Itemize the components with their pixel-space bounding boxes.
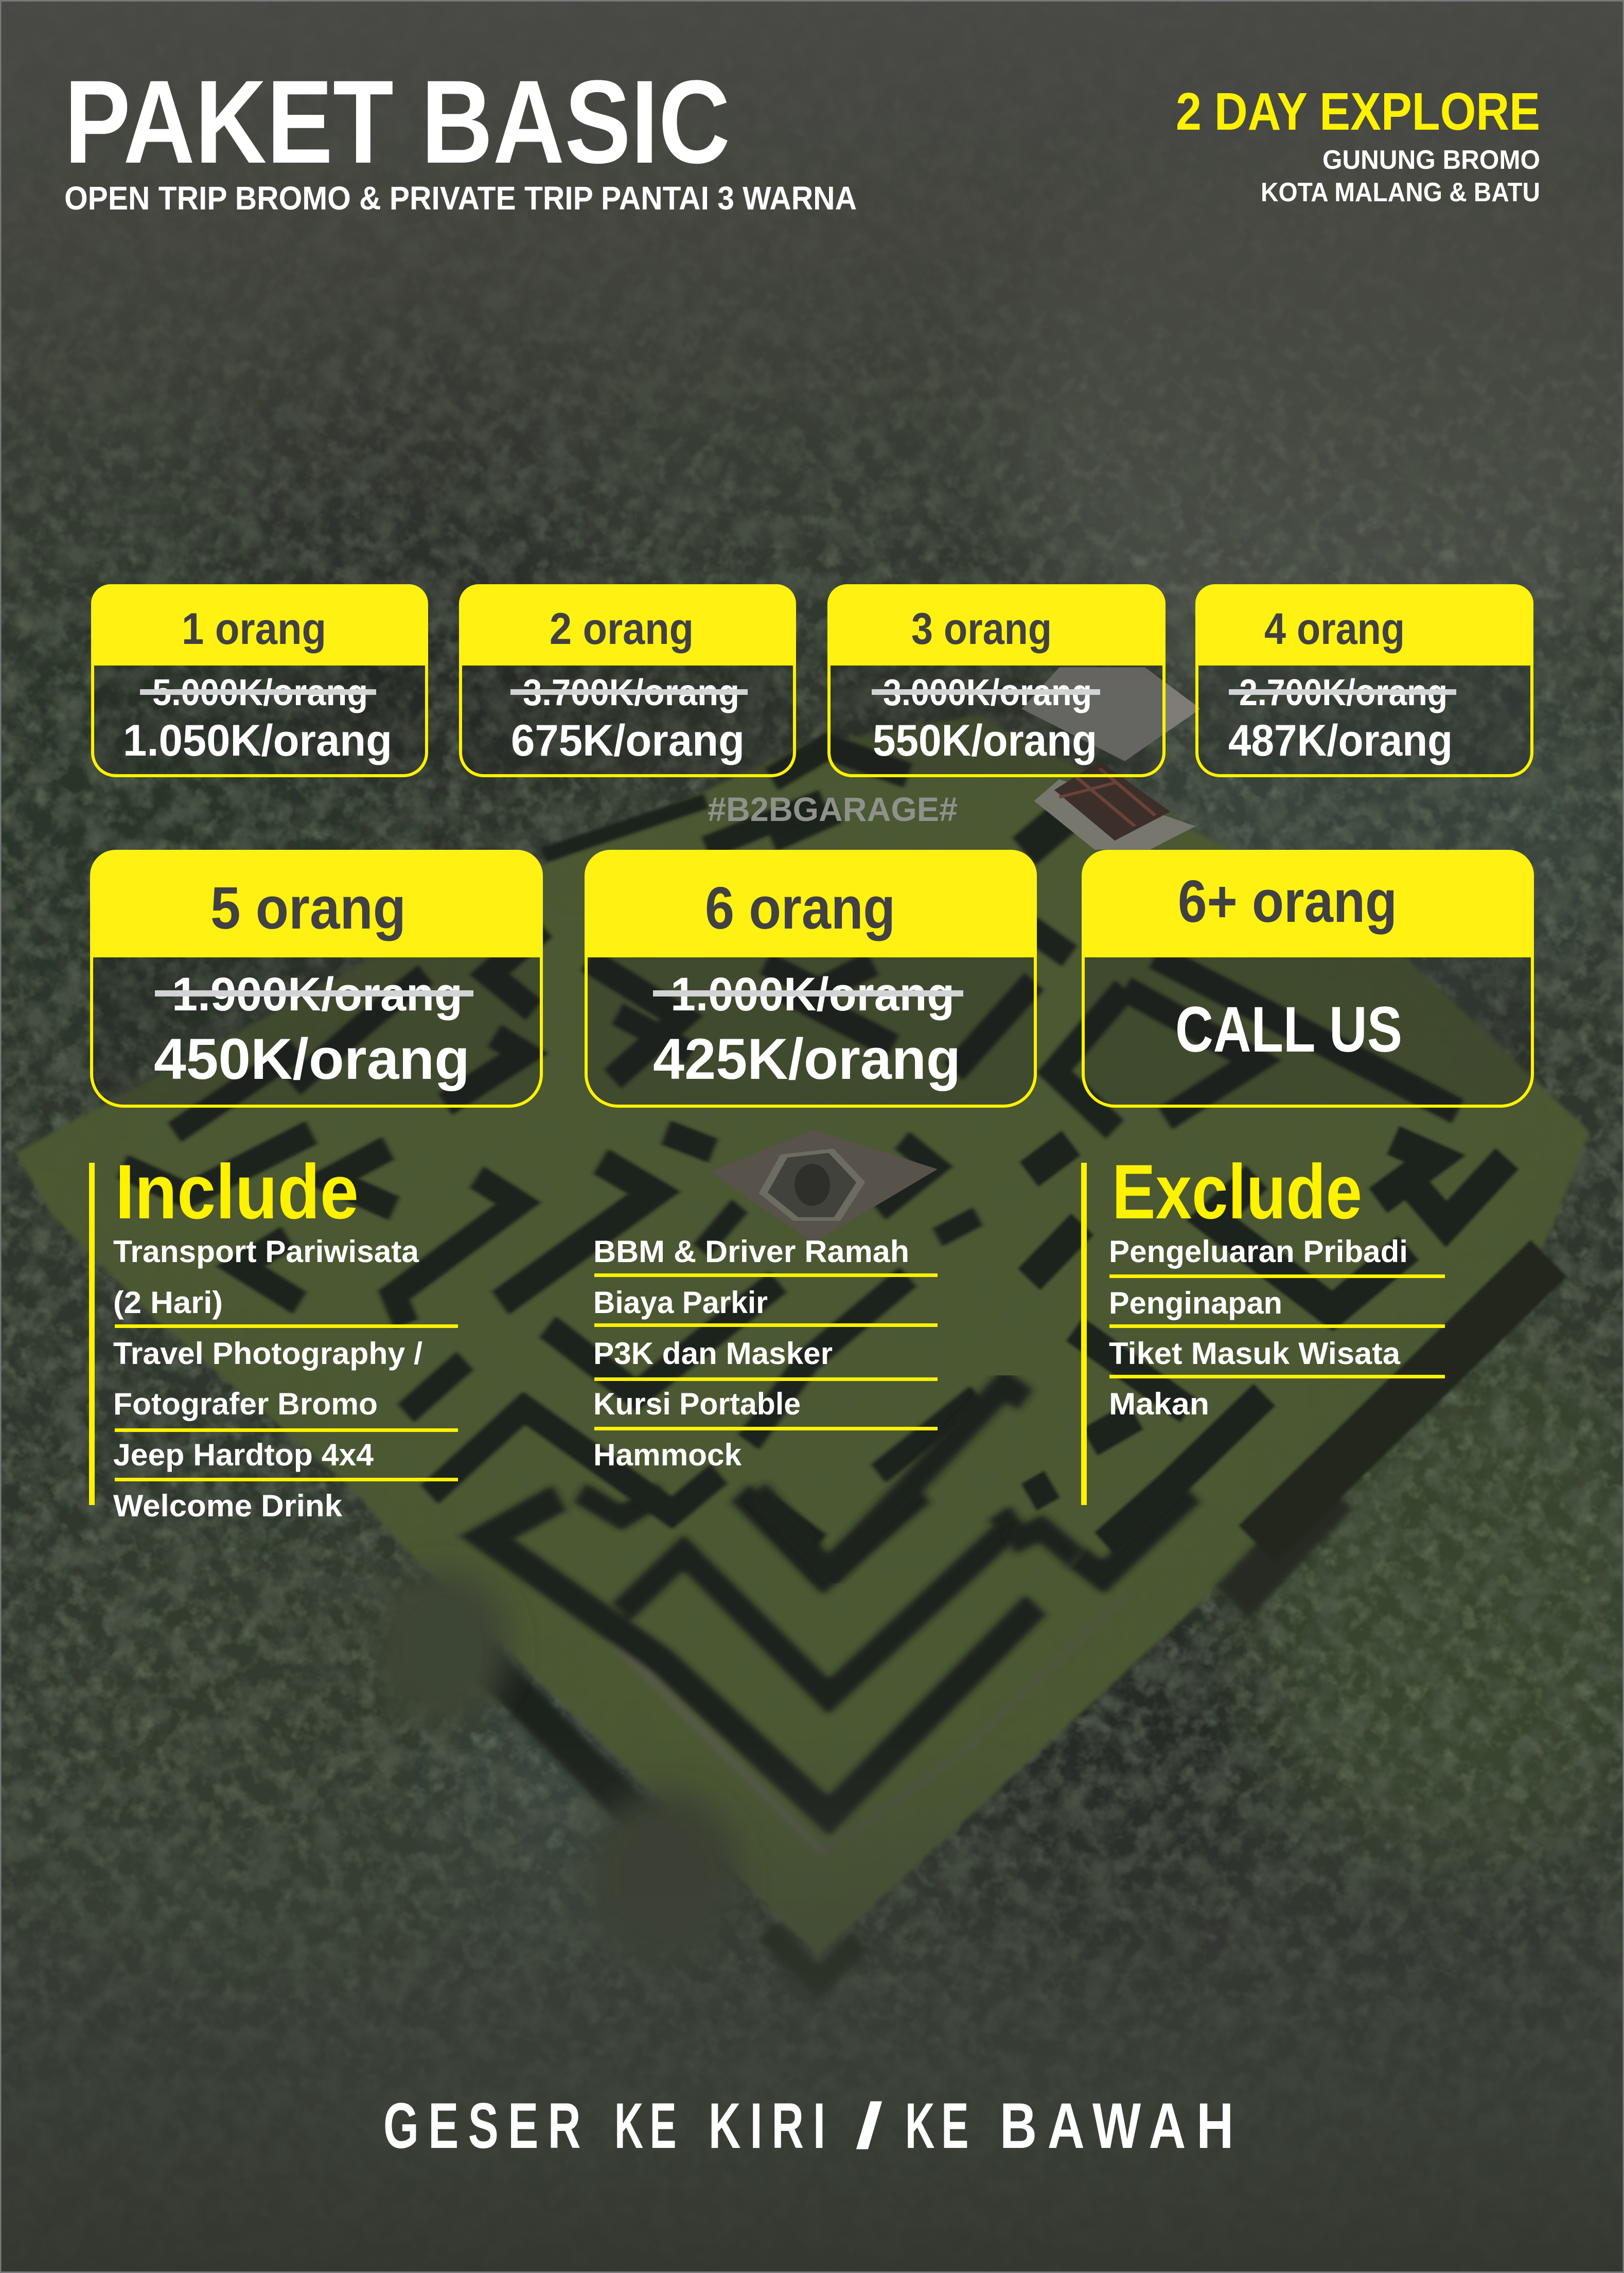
header label: 6 orang [705,875,895,941]
card body [829,664,1164,776]
include item: BBM & Driver Ramah [593,1234,909,1269]
card body [93,664,427,776]
accent bar [1081,1163,1087,1505]
card body [92,956,541,1106]
new price: 487K/orang [1228,716,1453,765]
new price: 1.050K/orang [123,716,392,765]
maze: left channels [122,1132,978,1544]
include item: Jeep Hardtop 4x4 [113,1438,374,1472]
include item: Hammock [593,1438,742,1472]
price card: 4 orang [1195,584,1533,776]
footer instruction: / [855,2090,883,2162]
card body [1197,664,1532,776]
header label: 5 orang [210,875,406,941]
card header [91,584,428,664]
strike line [872,689,1100,695]
card body [1083,956,1532,1106]
include item: Kursi Portable [593,1387,801,1421]
old price: 3.700K/orang [523,672,739,713]
header label: 4 orang [1264,604,1405,654]
exclude item: Pengeluaran Pribadi [1109,1234,1408,1269]
fountain plaza [710,1130,938,1243]
footer instruction: KE [614,2090,683,2162]
new price: 450K/orang [154,1027,470,1091]
header label: 1 orang [182,604,326,654]
old price: 5.000K/orang [152,672,368,713]
card header [1082,850,1534,956]
include item: Fotografer Bromo [113,1387,378,1421]
price card: 5 orang [90,850,543,1106]
strike line [140,689,376,695]
include item: Travel Photography / [113,1336,422,1371]
subtitle: OPEN TRIP BROMO & PRIVATE TRIP PANTAI 3 WARNA [64,180,857,217]
maze: centre channels [756,1385,1077,1573]
strike line [510,689,748,695]
card header [827,584,1166,664]
footer instruction: GESER [383,2090,590,2162]
footer instruction [383,2090,1244,2162]
maze: lower channels [446,1493,1336,1983]
card header [1195,584,1533,664]
strike line [1229,689,1456,695]
old price: 3.000K/orang [883,672,1092,713]
price card: 3 orang [827,584,1166,776]
footer instruction: KE [905,2090,975,2162]
exclude heading: Exclude [1112,1148,1362,1235]
pavilion building [1021,667,1201,850]
include item: Transport Pariwisata [113,1234,419,1269]
destination line 2: KOTA MALANG & BATU [1261,178,1540,207]
include item: Welcome Drink [113,1489,343,1523]
title: PAKET BASIC [64,56,730,188]
header label: 3 orang [911,604,1052,654]
bushes over maze tip [376,1570,741,1966]
accent bar [89,1163,95,1505]
maze: right channels [1029,1140,1549,1544]
price card: 6+ orang [1082,850,1534,1106]
duration heading: 2 DAY EXPLORE [1176,82,1540,141]
card body [586,956,1035,1106]
price card: 2 orang [459,584,796,776]
price card: 6 orang [585,850,1037,1106]
card header [459,584,796,664]
include item: P3K dan Masker [593,1336,833,1371]
new price: 550K/orang [873,716,1097,765]
include item: (2 Hari) [113,1285,223,1320]
include heading: Include [115,1148,359,1235]
new price: 425K/orang [653,1027,961,1091]
strike line [155,990,473,996]
price card: 1 orang [91,584,428,776]
exclude item: Tiket Masuk Wisata [1109,1336,1401,1371]
hedge maze base [0,710,1624,1961]
old price: 1.000K/orang [670,968,955,1021]
new price: 675K/orang [511,716,745,765]
exclude item: Penginapan [1109,1286,1282,1320]
header label: 6+ orang [1178,868,1397,935]
watermark: #B2BGARAGE# [708,790,958,828]
header label: 2 orang [550,604,694,654]
include item: Biaya Parkir [593,1285,768,1320]
strike line [653,990,963,996]
footer instruction: BAWAH [1000,2090,1244,2162]
panel: exclude [1081,1148,1445,1505]
footer instruction: KIRI [709,2090,835,2162]
panel: include [89,1148,938,1523]
card header [90,850,543,956]
maze: upper channels [772,747,1458,1129]
maze: upper left channels [174,801,823,1132]
exclude item: Makan [1109,1387,1209,1421]
destination line 1: GUNUNG BROMO [1322,145,1540,175]
card header [585,850,1037,956]
old price: 2.700K/orang [1239,672,1448,713]
old price: 1.900K/orang [172,968,463,1021]
card body [461,664,795,776]
call to action: CALL US [1175,994,1402,1065]
